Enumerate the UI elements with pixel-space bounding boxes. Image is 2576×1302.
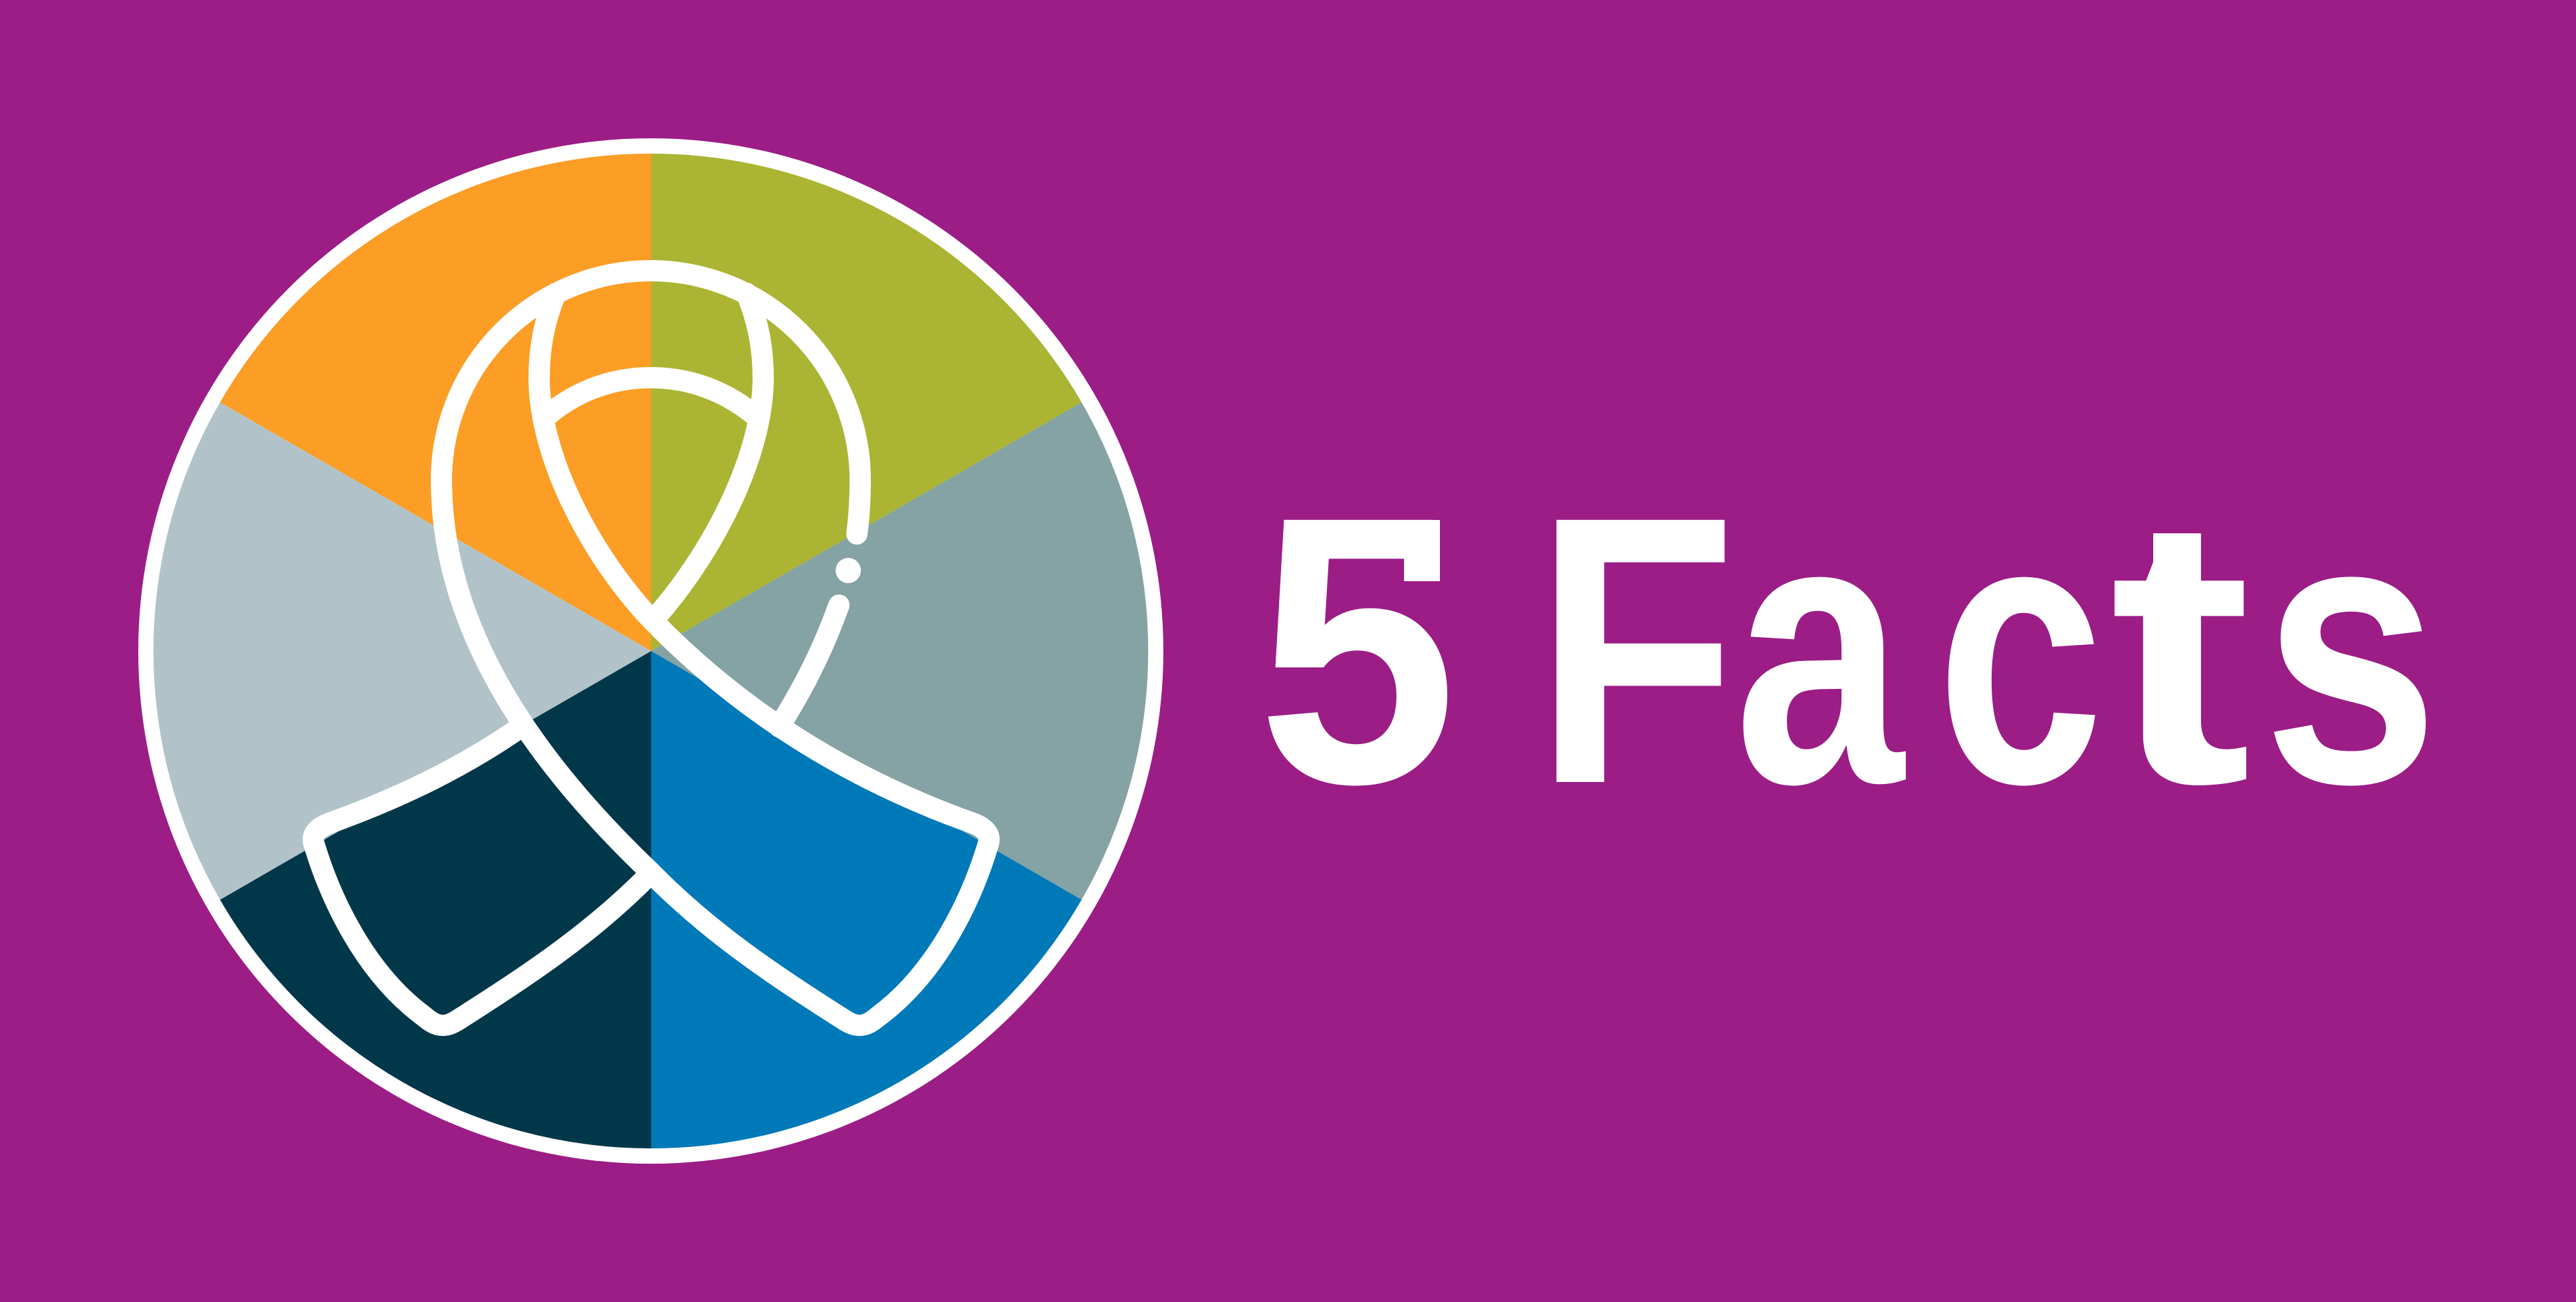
title: 5 Facts xyxy=(1257,437,2439,863)
segment: orange xyxy=(220,154,651,651)
letter F: F xyxy=(1534,437,1737,863)
letter c: c xyxy=(1936,438,2104,863)
ribbon: main continuous strand xyxy=(441,271,989,1025)
segment: grey teal xyxy=(651,402,1148,900)
segment: dark navy xyxy=(220,651,651,1148)
segment: blue xyxy=(651,651,1082,1148)
colour wheel segments xyxy=(154,154,1148,1148)
segment: light grey xyxy=(154,402,651,900)
ribbon: inner arch xyxy=(546,378,756,416)
awareness ribbon icon xyxy=(313,271,989,1025)
ribbon: left tail xyxy=(313,727,650,1025)
letter a: a xyxy=(1734,437,1906,862)
t squared stem top xyxy=(2153,533,2200,586)
logo: segmented circle with ribbon xyxy=(138,138,1163,1164)
letter t: t xyxy=(2109,437,2252,863)
ribbon: dot xyxy=(836,558,861,583)
letter 5: 5 xyxy=(1257,438,1457,863)
segment: olive xyxy=(651,154,1082,651)
white circle ring xyxy=(138,138,1163,1164)
letter s: s xyxy=(2263,437,2439,863)
ribbon: inner right strand xyxy=(659,293,763,613)
5 top-right flag xyxy=(1404,520,1440,581)
ribbon: lower right stroke xyxy=(779,605,839,727)
